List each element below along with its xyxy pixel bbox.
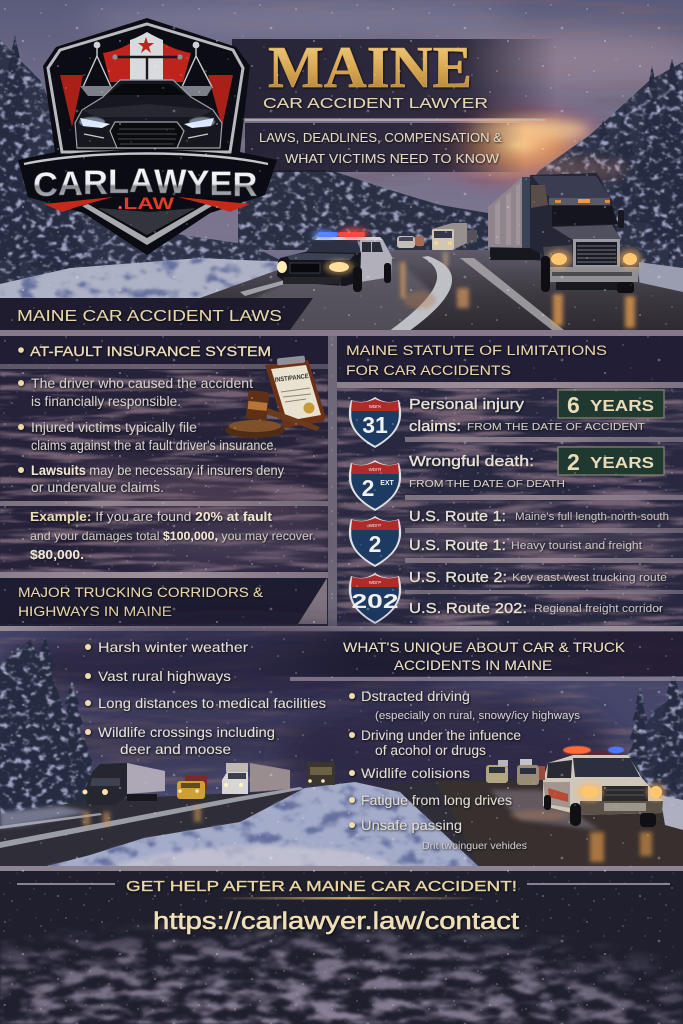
list: major corridor hazards: Harsh winter weather (98, 639, 248, 655)
example callout (30, 510, 313, 562)
lower traffic: trucks (82, 762, 335, 805)
heading: at-fault insurance system: AT-FAULT INSURANCE SYSTEM (30, 343, 271, 359)
list: unique factors: Dstracted driving (361, 689, 470, 704)
subheading: CAR ACCIDENT LAWYER (263, 95, 488, 112)
list: unique factors: Dnt twoinguer vehides (422, 840, 527, 852)
wrongful death deadline (409, 453, 565, 490)
badge: 2 years (558, 447, 664, 475)
icon: route 2 EXT sign (349, 460, 401, 511)
list: major corridor hazards: deer and moose (120, 741, 231, 757)
badge: 6 years: YEARS (590, 398, 654, 415)
list: unique factors: Fatigue from long drives (361, 793, 512, 808)
route list: Regional freight corridor (534, 603, 663, 615)
section heading: trucking corridors: MAJOR TRUCKING CORRIDORS & (18, 585, 263, 600)
badge: 2 years: 2 (567, 449, 580, 475)
heading: what's unique: ACCIDENTS IN MAINE (394, 657, 552, 673)
bullet list: fault rules: or undervalue claims. (31, 480, 164, 495)
example callout: and your damages total $100,000, you may recover (30, 529, 313, 543)
bullet list: fault rules: Injured victims typically file (31, 420, 197, 435)
heading: statute: MAINE STATUTE OF LIMITATIONS (346, 343, 607, 358)
badge: 6 years: 6 (567, 392, 580, 418)
icon: route 202 sign: 202 (352, 591, 398, 613)
tagline (259, 131, 503, 166)
personal injury deadline (409, 396, 646, 435)
lower winter scene (0, 626, 683, 870)
list: unique factors: of acohol or drugs (375, 743, 486, 758)
icon: route 31 sign (349, 397, 401, 448)
section heading: Maine car accident laws (0, 298, 313, 330)
list: unique factors: Driving under the infuence (361, 728, 521, 743)
heading: statute: FOR CAR ACCIDENTS (346, 363, 511, 378)
icon: insurance clipboard and gavel: INSTIPANCE (274, 373, 310, 384)
semi truck (488, 173, 642, 293)
heading: statute (346, 343, 607, 378)
personal injury deadline: FROM THE DATE OF ACCIDENT (467, 421, 646, 433)
wrongful death deadline: Wrongful death: (409, 453, 534, 470)
icon: route 2 sign: 2 (369, 531, 381, 557)
list: major corridor hazards: Long distances to medical facilities (98, 695, 326, 711)
list: unique factors (349, 689, 581, 852)
banner with wordmark (20, 150, 277, 255)
logo: CarLawyer shield (18, 18, 277, 255)
icon: route 2 sign: WDI'P (369, 523, 381, 528)
footer heading: GET HELP AFTER A MAINE CAR ACCIDENT! (126, 879, 517, 895)
icon: insurance clipboard and gavel (225, 356, 326, 438)
icon: route 2 EXT sign: 2 (362, 475, 374, 501)
section heading: trucking corridors: HIGHWAYS IN MAINE (18, 604, 172, 619)
list: unique factors: (especially on rural, snowy/icy highways (375, 710, 581, 722)
list: unique factors: Widlife colisions (361, 766, 470, 781)
route list: Maine's full length-north-south (515, 511, 669, 523)
panels background (0, 330, 683, 630)
bullet list: fault rules (18, 376, 284, 495)
route list: U.S. Route 1: (409, 537, 506, 554)
hero winter road scene (0, 0, 683, 335)
icon: route 31 sign: 31 (362, 412, 388, 438)
heading: what's unique: WHAT'S UNIQUE ABOUT CAR & TRUCK (343, 639, 626, 655)
badge: 2 years: YEARS (590, 455, 654, 472)
route list (409, 508, 669, 617)
list: major corridor hazards (85, 639, 326, 757)
icon: route 31 sign: WDI'K (369, 404, 381, 409)
bullet list: fault rules: Lawsuits may be necessary if insurers deny (31, 463, 284, 478)
example callout: $80,000. (30, 548, 84, 562)
personal injury deadline: claims: (409, 418, 461, 435)
wrongful death deadline: FROM THE DATE OF DEATH (409, 478, 565, 490)
footer call to action (0, 866, 683, 1024)
route list: Heavy tourist and freight (511, 540, 642, 552)
personal injury deadline: Personal injury (409, 396, 525, 413)
route list: U.S. Route 202: (409, 600, 527, 617)
title banner (232, 34, 557, 172)
icon: route 2 sign (349, 516, 401, 567)
route list: U.S. Route 2: (409, 569, 507, 586)
distant vehicles (397, 223, 477, 250)
icon: scales of justice (80, 42, 213, 96)
icon: route 202 sign (349, 573, 401, 624)
icon: route 202 sign: WDI'P (369, 580, 381, 585)
section heading: Maine car accident laws: MAINE CAR ACCIDENT LAWS (17, 308, 282, 325)
tagline: LAWS, DEADLINES, COMPENSATION & (259, 131, 503, 145)
icon: route 2 EXT sign: EXT (380, 480, 395, 487)
icon: car front (75, 80, 222, 148)
route list: U.S. Route 1: (409, 508, 506, 525)
heading: Maine: MAINE (268, 34, 472, 100)
police car (277, 227, 392, 292)
contact url: https://carlawyer.law/contact (153, 908, 519, 935)
list: major corridor hazards: Vast rural highways (98, 668, 231, 684)
route list: Key east-west trucking route (512, 572, 667, 584)
bullet list: fault rules: The driver who caused the accident (31, 376, 253, 391)
panel: statute of limitations (346, 343, 669, 624)
section heading: trucking corridors (0, 578, 327, 624)
banner with wordmark: .LAW (117, 194, 175, 213)
list: major corridor hazards: Wildlife crossings including (98, 724, 275, 740)
tagline: WHAT VICTIMS NEED TO KNOW (285, 152, 499, 166)
panel: at-fault insurance (18, 343, 326, 562)
badge: 6 years (558, 390, 664, 418)
lower traffic: emergency SUV (486, 746, 666, 827)
banner with wordmark: CARLAWYER (33, 162, 258, 204)
icon: route 2 EXT sign: WDI'R (369, 467, 382, 472)
heading: what's unique (250, 632, 683, 681)
bullet list: fault rules: claims against the at fault driver's insurance. (31, 438, 277, 453)
example callout: Example: If you are found 20% at fault (30, 510, 273, 524)
list: unique factors: Unsafe passing (361, 818, 462, 833)
bullet list: fault rules: is financially responsible. (31, 394, 181, 409)
